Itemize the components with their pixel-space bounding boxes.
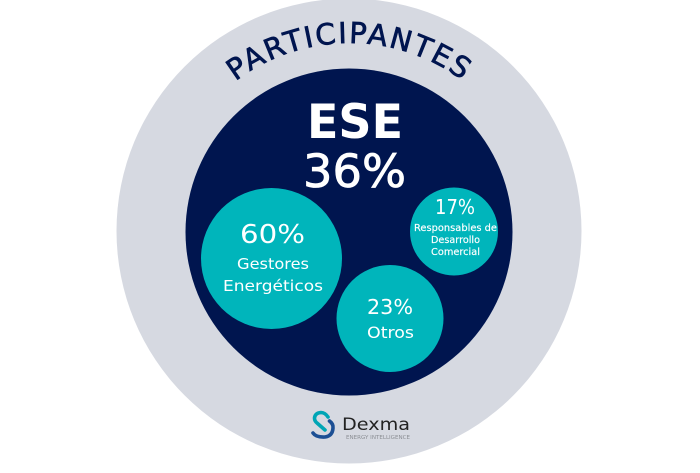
label: Gestores: Gestores <box>237 255 309 273</box>
navy circle <box>186 68 512 396</box>
outer grey circle <box>116 0 582 464</box>
title: PARTICIPANTES: PARTICIPANTES <box>225 22 472 80</box>
label: Responsables de: Responsables de <box>414 223 497 234</box>
value: 17%: 17% <box>435 195 475 219</box>
bubble: gestores energéticos <box>201 188 342 329</box>
bubble: responsables de desarrollo comercial <box>410 188 498 276</box>
label: Energéticos: Energéticos <box>223 277 323 295</box>
label: Desarrollo: Desarrollo <box>431 235 480 246</box>
label: Otros: Otros <box>367 323 414 342</box>
value: 60%: 60% <box>240 220 305 250</box>
label: Comercial: Comercial <box>431 247 480 258</box>
heading: 36%: 36% <box>303 145 406 198</box>
wordmark: Dexma: Dexma <box>342 415 410 435</box>
heading: ESE: ESE <box>307 95 403 150</box>
value: 23%: 23% <box>367 295 413 319</box>
logo: Dexma <box>313 412 410 441</box>
bubble: otros <box>336 265 444 372</box>
tagline: energy intelligence: ENERGY INTELLIGENCE <box>346 435 410 441</box>
icon: Dexma mark <box>313 412 333 437</box>
